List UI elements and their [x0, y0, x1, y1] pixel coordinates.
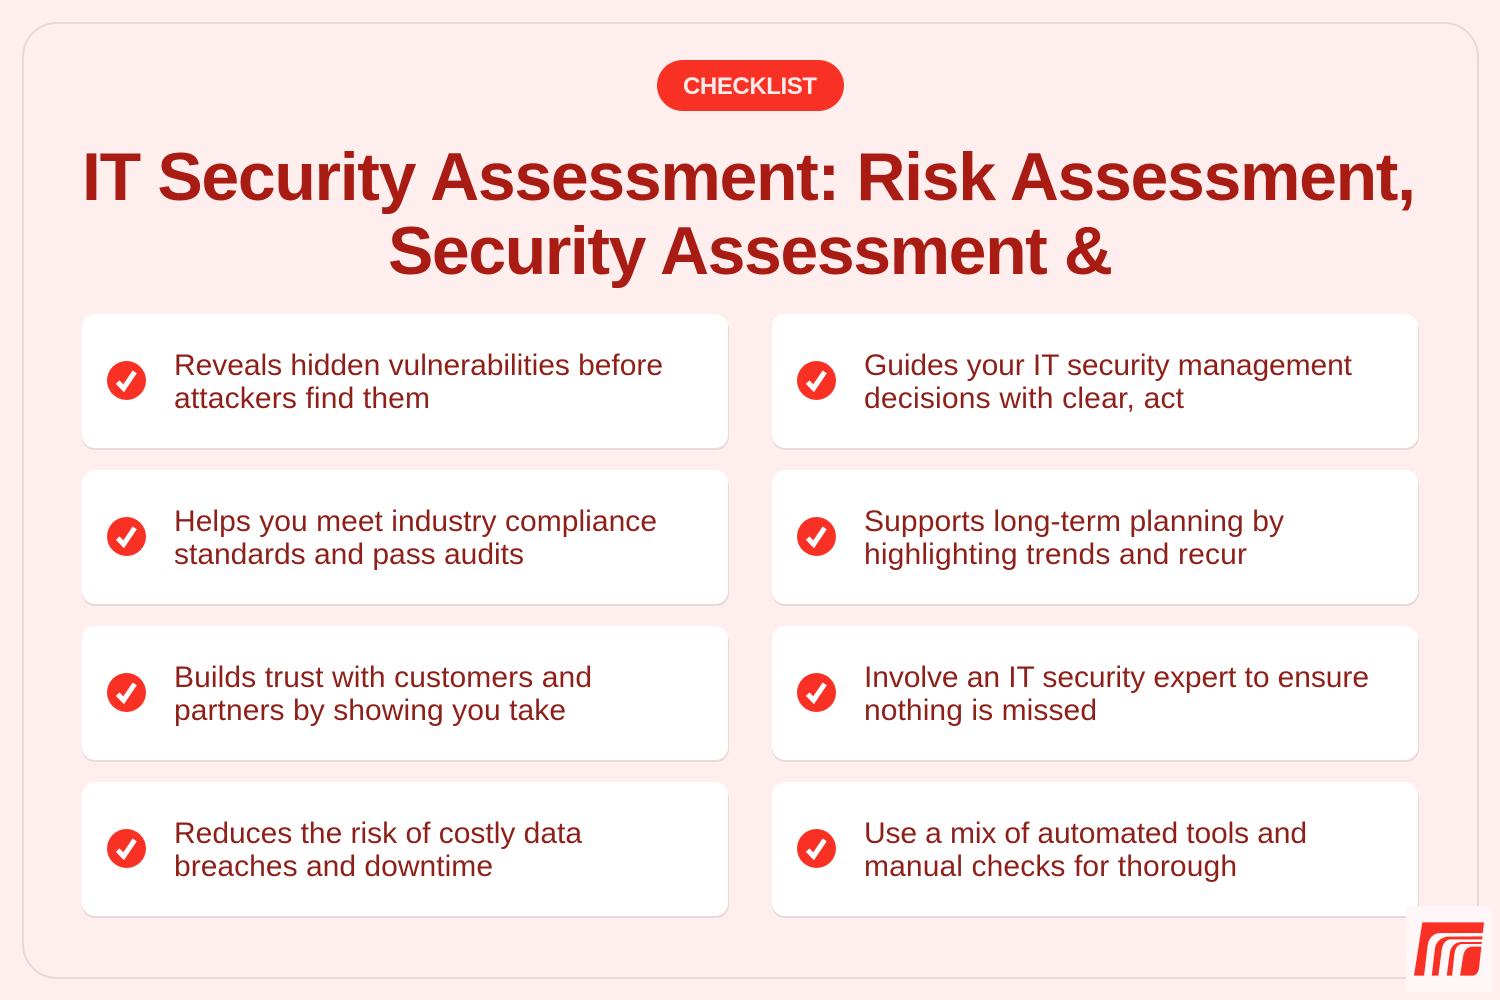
card: compliance: Helps you meet industry compliance	[174, 505, 657, 538]
card: security expert	[772, 626, 1419, 762]
badge: checklist	[657, 60, 844, 111]
card: compliance	[82, 470, 729, 606]
card: reveals hidden vulnerabilities: attackers find them	[174, 382, 430, 415]
card: automated tools: Use a mix of automated tools and	[864, 817, 1307, 850]
card: guides management	[772, 314, 1419, 450]
icon: check	[797, 829, 836, 868]
card: long-term planning: highlighting trends and recur	[864, 538, 1247, 571]
card: trust	[82, 626, 729, 762]
icon: check	[797, 673, 836, 712]
card: reduces risk: breaches and downtime	[174, 850, 493, 883]
card: long-term planning	[772, 470, 1419, 606]
title: Security Assessment &	[388, 213, 1113, 289]
icon: check	[797, 517, 836, 556]
card: reveals hidden vulnerabilities: Reveals hidden vulnerabilities before	[174, 349, 663, 382]
badge: checklist: CHECKLIST	[683, 73, 817, 100]
icon: check	[797, 361, 836, 400]
card: long-term planning: Supports long-term planning by	[864, 505, 1284, 538]
icon: check	[107, 517, 146, 556]
card: automated tools	[772, 782, 1419, 918]
card: trust: partners by showing you take	[174, 694, 566, 727]
card: reduces risk: Reduces the risk of costly data	[174, 817, 582, 850]
title	[82, 139, 1416, 289]
logo	[1406, 906, 1492, 992]
card: automated tools: manual checks for thorough	[864, 850, 1237, 883]
icon: check	[107, 829, 146, 868]
icon: check	[107, 361, 146, 400]
card: guides management: decisions with clear, act	[864, 382, 1185, 415]
title: IT Security Assessment: Risk Assessment,	[82, 139, 1416, 215]
card: security expert: nothing is missed	[864, 694, 1097, 727]
card: compliance: standards and pass audits	[174, 538, 524, 571]
card: security expert: Involve an IT security expert to ensure	[864, 661, 1369, 694]
card: reveals hidden vulnerabilities	[82, 314, 729, 450]
card: reduces risk	[82, 782, 729, 918]
icon: check	[107, 673, 146, 712]
card: trust: Builds trust with customers and	[174, 661, 592, 694]
card: guides management: Guides your IT security management	[864, 349, 1353, 382]
